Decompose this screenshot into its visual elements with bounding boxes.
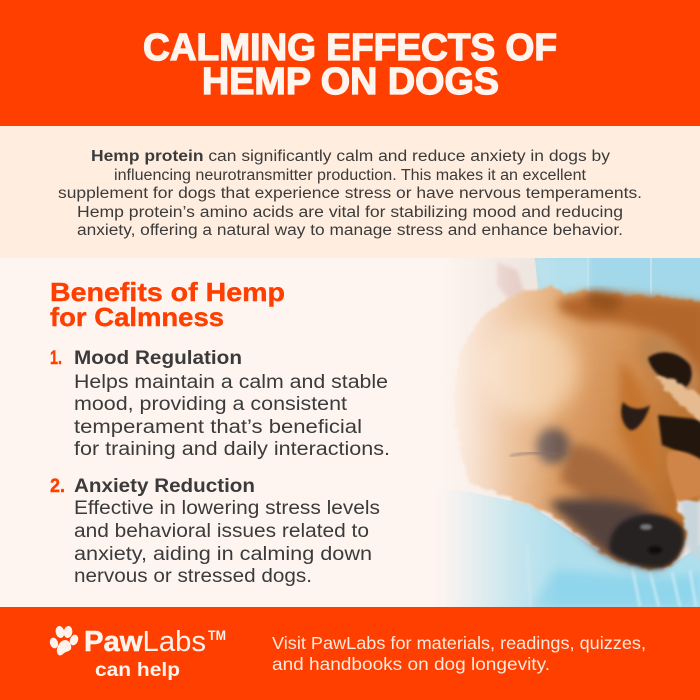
benefit 1 text (74, 372, 390, 460)
dog head and body (454, 287, 700, 570)
benefit 2 text: anxiety, aiding in calming down (74, 544, 372, 565)
number 2: 2. (50, 476, 65, 497)
intro text: influencing neurotransmitter production. This makes it an excellent (114, 167, 587, 184)
left fade (430, 258, 560, 607)
title: HEMP ON DOGS (202, 61, 499, 103)
title (143, 27, 557, 103)
intro text: Hemp protein can significantly calm and reduce anxiety in dogs by (91, 148, 610, 165)
benefit 2 text: and behavioral issues related to (74, 521, 369, 542)
nose (610, 514, 685, 568)
snout shadow (548, 498, 680, 568)
logo wordmark: PawLabs (84, 626, 206, 658)
footer text (272, 633, 646, 674)
footer band (0, 607, 700, 700)
face shading (620, 360, 660, 480)
blanket (453, 490, 700, 607)
can help: can help (95, 660, 180, 681)
benefit 2 text: nervous or stressed dogs. (74, 566, 312, 587)
benefits panel background (0, 258, 700, 607)
intro text (58, 148, 642, 239)
benefit 1 text: mood, providing a consistent (74, 394, 348, 415)
dark neck area (658, 415, 700, 465)
dark ear (648, 352, 692, 388)
footer text: and handbooks on dog longevity. (272, 654, 550, 674)
benefit 1 text: for training and daily interactions. (74, 439, 390, 460)
icon: paw (48, 625, 80, 655)
benefit 1 text: temperament that’s beneficial (74, 417, 362, 438)
benefit 2: anxiety reduction (50, 476, 380, 587)
left eye (510, 428, 570, 464)
photo: sleeping dog (430, 258, 700, 607)
title: CALMING EFFECTS OF (143, 27, 557, 69)
ear flap (640, 334, 700, 395)
heading: benefits (50, 277, 285, 332)
intro panel (0, 126, 700, 258)
heading: benefits: for Calmness (50, 302, 224, 332)
right eye (621, 402, 650, 430)
forehead highlight (482, 322, 578, 418)
benefit 2 text: Effective in lowering stress levels (74, 498, 380, 519)
header band (0, 0, 700, 126)
intro text: supplement for dogs that experience stress or have nervous temperaments. (58, 185, 642, 202)
footer text: Visit PawLabs for materials, readings, quizzes, (272, 633, 646, 653)
benefit 1 heading: Mood Regulation (74, 348, 242, 369)
number 1: 1. (50, 348, 62, 369)
benefit 2 heading: Anxiety Reduction (74, 476, 255, 497)
benefit 1: mood regulation (50, 348, 390, 460)
benefit 1 text: Helps maintain a calm and stable (74, 372, 388, 393)
paw (667, 451, 700, 502)
benefit 2 text (74, 498, 380, 587)
intro text: anxiety, offering a natural way to manage stress and enhance behavior. (77, 222, 623, 239)
upper body darker fur (554, 286, 700, 371)
ear fur tuft (655, 377, 700, 425)
intro text: Hemp protein’s amino acids are vital for stabilizing mood and reducing (77, 204, 623, 221)
heading: benefits: Benefits of Hemp (50, 277, 285, 307)
trademark: TM (208, 627, 226, 643)
